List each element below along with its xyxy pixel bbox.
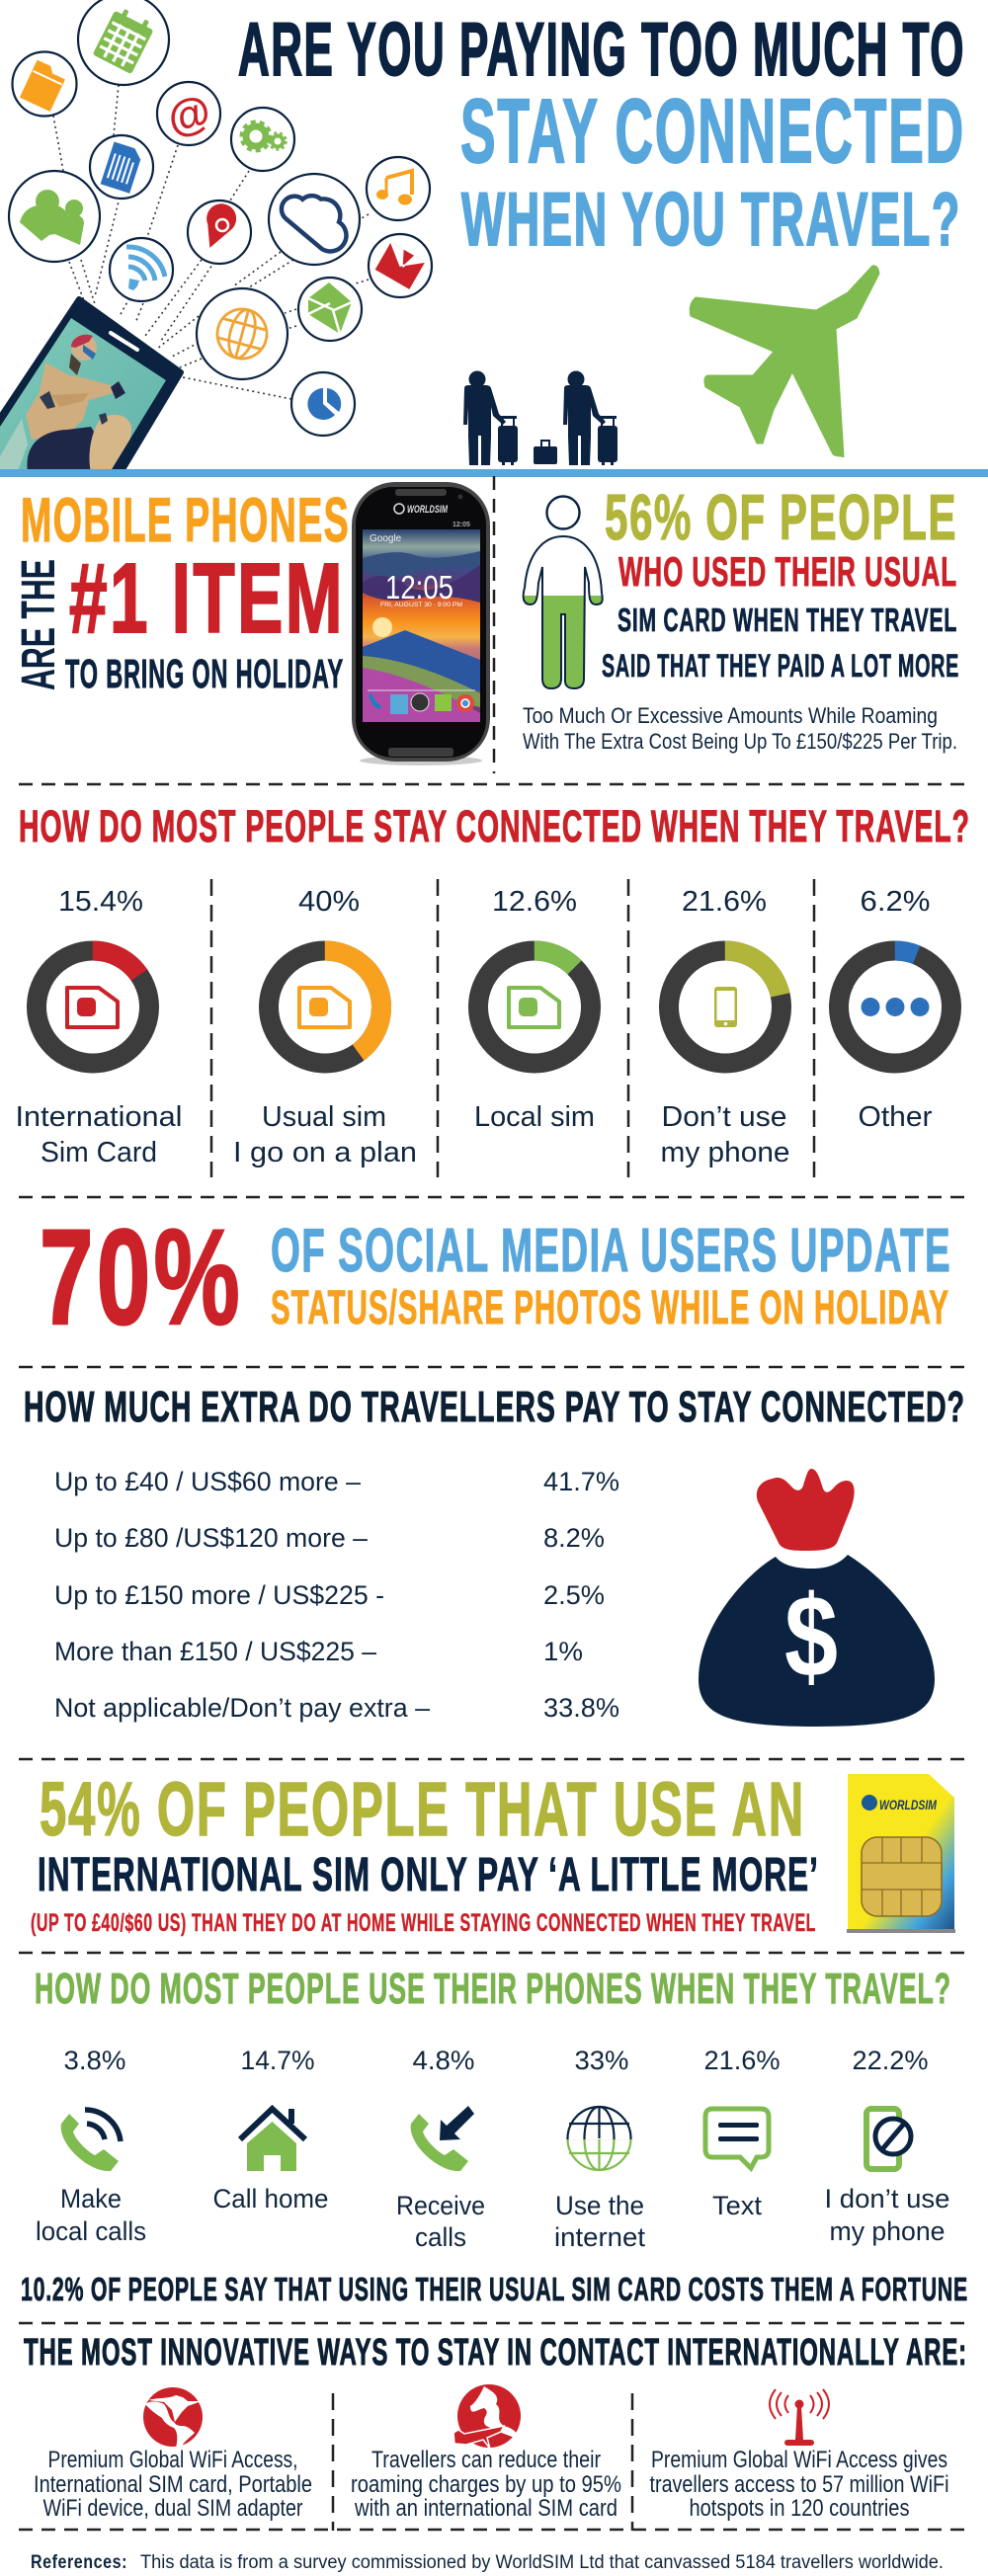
icon: red globe americas bbox=[143, 2387, 203, 2448]
panel: mobile phones number one item: MOBILE PHONES bbox=[21, 486, 350, 555]
icon: red globe with plane bbox=[453, 2384, 521, 2449]
dotted connector lines bbox=[53, 85, 369, 399]
chart: local sim 12.6 percent: Local sim bbox=[474, 1101, 595, 1133]
list: extra cost percentages: 2.5% bbox=[543, 1580, 605, 1610]
item: use the internet: internet bbox=[554, 2222, 646, 2252]
illustration: worldsim sim card bbox=[847, 1774, 955, 1933]
item: dont use phone: I don’t use bbox=[824, 2184, 950, 2214]
icon: gears bbox=[231, 108, 294, 171]
chart: other 6.2 percent: Other bbox=[858, 1101, 933, 1133]
references: This data is from a survey commissioned by WorldSIM Ltd that canvassed 5184 travellers worldwide. bbox=[140, 2552, 944, 2573]
illustration: worldsim smartphone: 12:05 bbox=[453, 522, 470, 528]
chart: international sim card 15.4 percent: Sim Card bbox=[41, 1137, 157, 1168]
chart: international sim card 15.4 percent bbox=[16, 886, 182, 1168]
item: make local calls: Make bbox=[60, 2184, 122, 2214]
icon: money bag: $ bbox=[784, 1571, 838, 1702]
icon: wifi bbox=[110, 238, 173, 301]
illustration: worldsim smartphone: WORLDSIM bbox=[407, 504, 449, 516]
list: extra cost percentages: Up to £40 / US$60 more – bbox=[54, 1467, 361, 1496]
chart: local sim 12.6 percent: 12.6% bbox=[492, 886, 577, 918]
chart: usual sim 40 percent: Usual sim bbox=[262, 1101, 386, 1133]
icon: at sign: @ bbox=[162, 86, 215, 144]
icon: cloud bbox=[269, 174, 361, 265]
list: extra cost percentages: 8.2% bbox=[543, 1523, 605, 1553]
list: extra cost percentages: 41.7% bbox=[543, 1467, 619, 1496]
icon: red antenna bbox=[770, 2389, 829, 2446]
panel: reduce roaming charges bbox=[351, 2384, 621, 2522]
icon: document bbox=[90, 135, 153, 199]
panel: mobile phones number one item: ARE THE bbox=[13, 559, 65, 690]
list: extra cost percentages: 33.8% bbox=[543, 1693, 619, 1723]
item: text bbox=[703, 2046, 781, 2220]
panel: premium global wifi access: Premium Global WiFi Access, bbox=[47, 2447, 298, 2473]
item: dont use phone: my phone bbox=[830, 2216, 945, 2246]
list: extra cost percentages: Up to £80 /US$120 more – bbox=[54, 1523, 368, 1553]
icon: money bag bbox=[699, 1469, 935, 1727]
icon: half filled person bbox=[524, 496, 603, 688]
callout: 70 percent social media bbox=[40, 1202, 951, 1353]
list: extra cost percentages: Up to £150 more / US$225 - bbox=[54, 1580, 384, 1610]
list: extra cost percentages: 1% bbox=[543, 1637, 583, 1666]
icon: airplane bbox=[690, 266, 879, 456]
divider bar bbox=[0, 469, 988, 477]
chart: dont use my phone 21.6 percent bbox=[660, 886, 790, 1168]
panel: reduce roaming charges: roaming charges by up to 95% bbox=[351, 2471, 621, 2498]
chart: local sim 12.6 percent bbox=[474, 886, 595, 1133]
callout: 54 percent of people bbox=[31, 1767, 819, 1937]
illustration: worldsim sim card: WORLDSIM bbox=[879, 1797, 937, 1812]
panel: premium global wifi access: WiFi device, dual SIM adapter bbox=[43, 2495, 302, 2522]
item: call home bbox=[213, 2046, 328, 2214]
chart: usual sim 40 percent: I go on a plan bbox=[233, 1137, 417, 1168]
list: extra cost percentages: More than £150 / US$225 – bbox=[54, 1637, 376, 1666]
chart: usual sim 40 percent: 40% bbox=[298, 886, 360, 918]
item: use the internet: Use the bbox=[555, 2191, 644, 2220]
chart: international sim card 15.4 percent: International bbox=[16, 1101, 182, 1133]
item: make local calls bbox=[36, 2046, 146, 2246]
icon: pie chart bbox=[291, 372, 355, 436]
illustration: worldsim smartphone bbox=[352, 482, 490, 765]
item: receive calls: Receive bbox=[396, 2191, 485, 2220]
callout: 70 percent social media: 70% bbox=[40, 1202, 243, 1353]
icon: travellers with luggage bbox=[463, 371, 618, 465]
item: receive calls bbox=[396, 2046, 485, 2252]
panel: mobile phones number one item: TO BRING ON HOLIDAY bbox=[65, 651, 344, 696]
item: use the internet bbox=[554, 2046, 646, 2252]
panel: 56 percent of people: Too Much Or Excessive Amounts While Roaming bbox=[523, 703, 938, 728]
icon: orange globe bbox=[197, 288, 288, 379]
panel: mobile phones number one item bbox=[13, 486, 350, 696]
panel: wifi hotspots: hotspots in 120 countries bbox=[690, 2495, 909, 2522]
item: text: 21.6% bbox=[703, 2046, 781, 2075]
panel: premium global wifi access bbox=[34, 2387, 312, 2522]
panel: mobile phones number one item: #1 ITEM bbox=[69, 543, 345, 654]
item: make local calls: 3.8% bbox=[63, 2046, 126, 2075]
chart: usual sim 40 percent bbox=[233, 886, 417, 1168]
item: receive calls: calls bbox=[415, 2222, 466, 2252]
item: receive calls: 4.8% bbox=[413, 2046, 474, 2075]
item: make local calls: local calls bbox=[36, 2216, 146, 2246]
chart: other 6.2 percent: 6.2% bbox=[860, 886, 931, 918]
icon: folder bbox=[12, 51, 77, 117]
panel: 56 percent of people bbox=[523, 481, 959, 754]
icon: music note bbox=[367, 157, 430, 220]
chart: dont use my phone 21.6 percent: 21.6% bbox=[682, 886, 767, 918]
icon: calendar bbox=[78, 0, 169, 85]
item: text: Text bbox=[712, 2191, 762, 2220]
icon: location pin bbox=[188, 201, 251, 264]
illustration: worldsim smartphone: FRI, AUGUST 30 · 9:00 PM bbox=[380, 603, 462, 608]
panel: premium global wifi access: International SIM card, Portable bbox=[34, 2471, 312, 2498]
chart: other 6.2 percent bbox=[839, 886, 951, 1133]
icon: people group bbox=[9, 171, 100, 262]
title bbox=[238, 8, 965, 262]
references: References: bbox=[31, 2552, 127, 2573]
item: dont use phone: 22.2% bbox=[852, 2046, 929, 2075]
chart: dont use my phone 21.6 percent: my phone bbox=[660, 1137, 790, 1168]
illustration: worldsim smartphone: 12:05 bbox=[385, 569, 453, 605]
list: extra cost percentages bbox=[54, 1467, 619, 1723]
panel: wifi hotspots bbox=[650, 2389, 948, 2522]
icon: red mail bbox=[369, 234, 432, 297]
panel: reduce roaming charges: with an international SIM card bbox=[354, 2495, 618, 2522]
list: extra cost percentages: Not applicable/Don’t pay extra – bbox=[54, 1693, 430, 1723]
item: dont use phone bbox=[824, 2046, 950, 2246]
panel: reduce roaming charges: Travellers can reduce their bbox=[371, 2447, 601, 2473]
chart: international sim card 15.4 percent: 15.4% bbox=[58, 886, 143, 918]
item: call home: Call home bbox=[213, 2184, 328, 2214]
item: call home: 14.7% bbox=[241, 2046, 314, 2075]
chart: dont use my phone 21.6 percent: Don’t use bbox=[662, 1101, 786, 1133]
icon: green mail bbox=[298, 278, 362, 341]
illustration: tilted smartphone with photo bbox=[0, 299, 181, 472]
item: use the internet: 33% bbox=[575, 2046, 628, 2075]
illustration: worldsim smartphone: Google bbox=[370, 533, 402, 544]
